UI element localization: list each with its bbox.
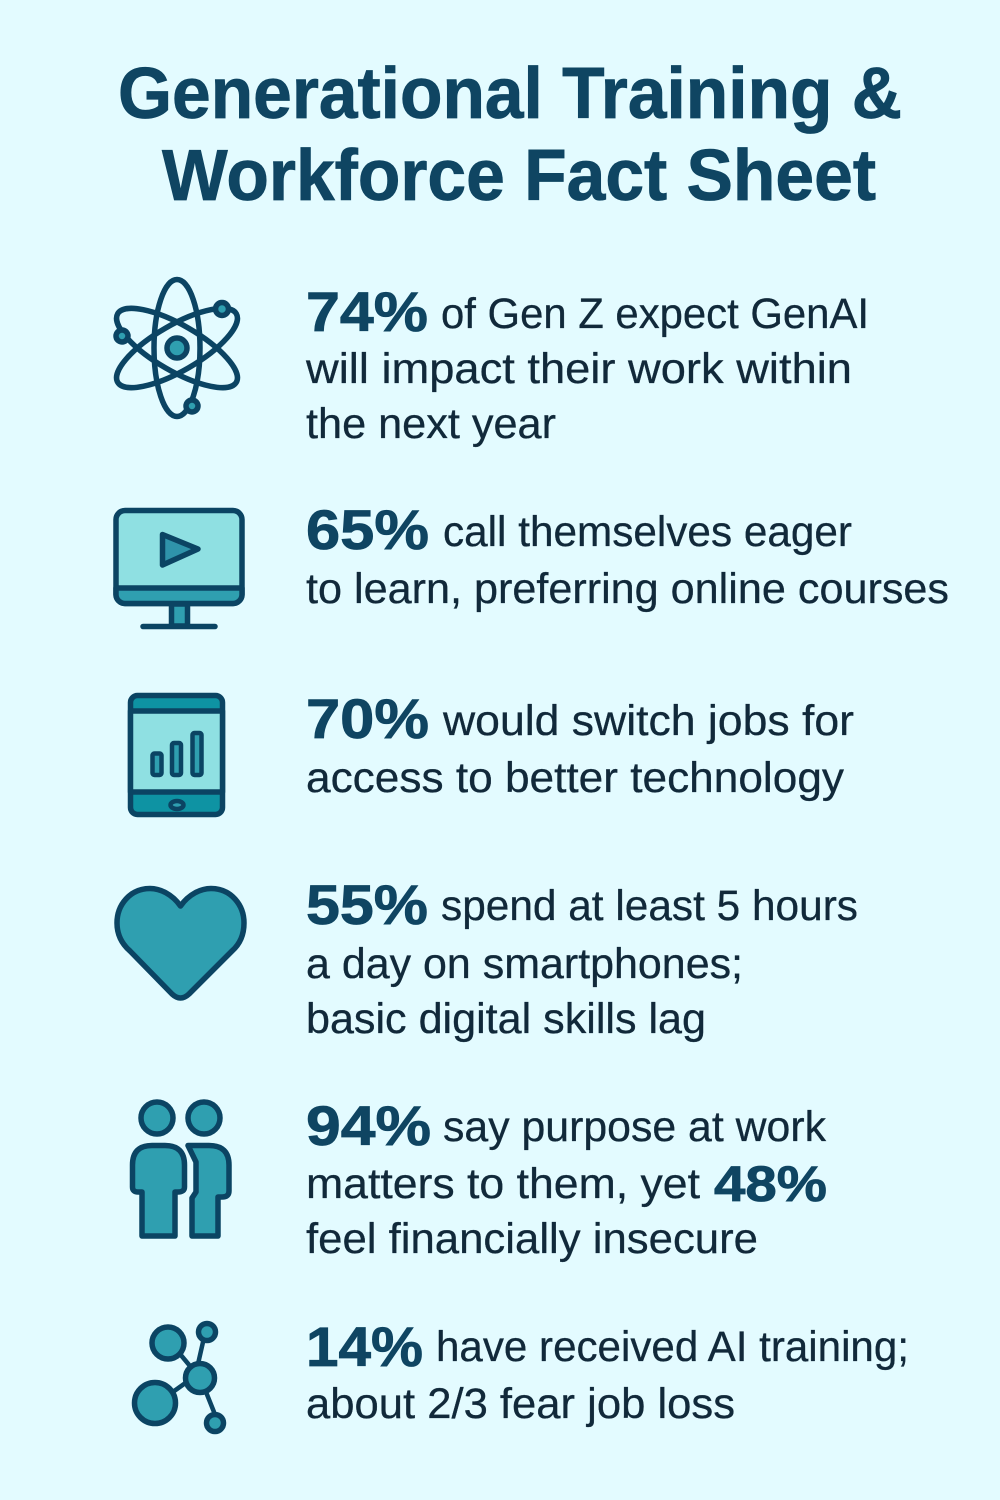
fact row: switch jobs [130,687,854,814]
text: 94%: matters to them, yet [306,1160,700,1208]
text: 74% [305,280,869,448]
fact row: eager to learn [116,498,949,626]
title: Workforce Fact Sheet [162,136,876,216]
text: 65% [306,498,949,613]
text: 55%: a day on smartphones; [306,940,743,988]
text: 70%: access to better technology [306,754,845,802]
text: 94%: feel financially insecure [306,1215,758,1263]
title [118,54,902,216]
icon: network nodes [134,1324,224,1432]
text: 14%: have received AI training; [436,1323,909,1371]
text: 14%: about 2/3 fear job loss [306,1380,735,1428]
fact row: smartphones [117,873,858,1043]
text: 55% [306,873,858,1043]
text: 94%: say purpose at work [443,1103,826,1151]
text: 94% [306,1094,827,1263]
text: 55%: 55% [306,873,428,936]
icon: atom [106,280,248,416]
text: 70% [306,687,854,802]
icon: heart [117,888,244,998]
fact row: Gen Z and GenAI [106,280,869,448]
text: 74%: of Gen Z expect GenAI [441,290,869,338]
text: 55%: spend at least 5 hours [441,882,858,930]
text: 65%: to learn, preferring online courses [306,565,949,613]
text: 94%: 94% [306,1094,431,1157]
text: 70%: 70% [306,687,429,750]
text: 14% [306,1315,909,1428]
text: 70%: would switch jobs for [442,697,854,745]
fact row: AI training [134,1315,909,1432]
text: 74%: will impact their work within [305,345,852,393]
text: 14%: 14% [306,1315,423,1378]
icon: tablet with bar chart [130,696,222,814]
text: 65%: 65% [306,498,429,561]
text: 65%: call themselves eager [443,508,852,556]
text: 74%: 74% [306,280,428,343]
text: 55%: basic digital skills lag [306,995,706,1043]
title: Generational Training & [118,54,902,134]
text: 74%: the next year [306,400,556,448]
icon: monitor with play button [116,510,242,626]
text: 94%: 48% [714,1156,827,1212]
fact row: purpose at work [132,1094,827,1263]
icon: two people [132,1102,229,1236]
